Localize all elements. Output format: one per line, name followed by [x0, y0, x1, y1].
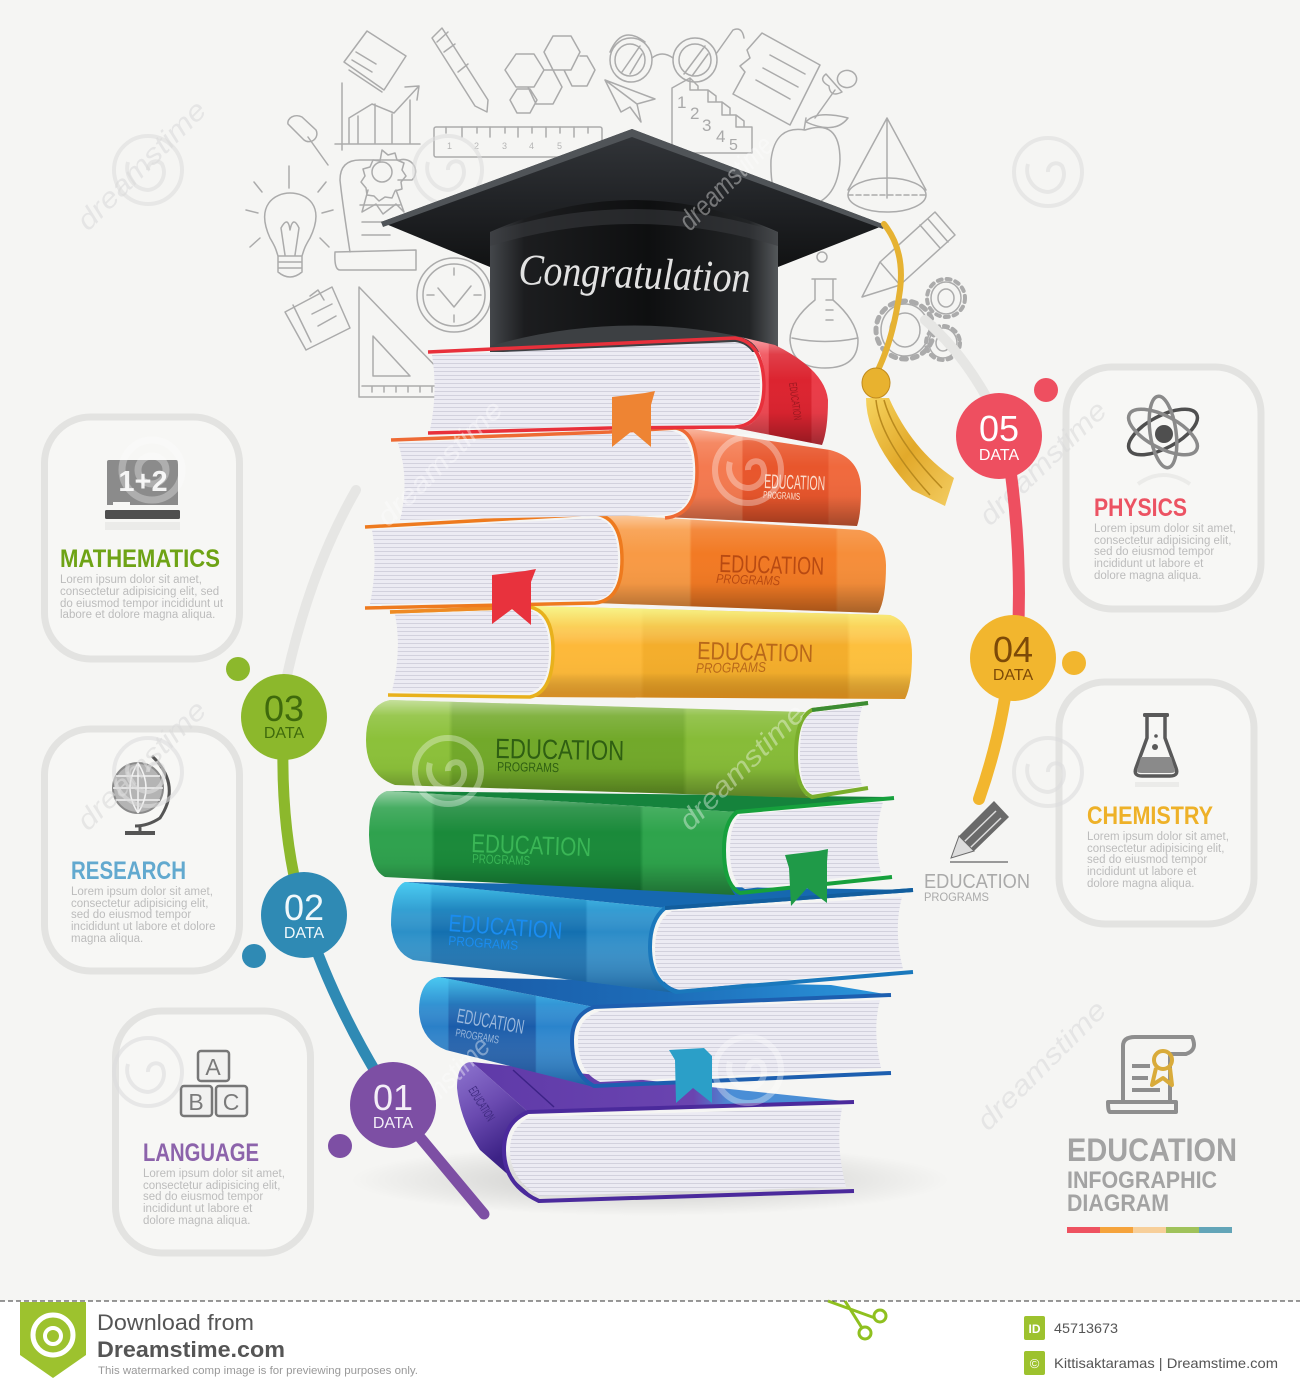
step 05 — [956, 378, 1058, 479]
label: education programs — [924, 871, 1030, 904]
book 7: blue: PROGRAMS — [448, 933, 519, 953]
heading: research: RESEARCH — [71, 857, 186, 885]
text: mathematics body: labore et dolore magna aliqua. — [60, 609, 215, 621]
doodle icons cluster: 2 — [474, 141, 479, 151]
icon: pencil start marker — [950, 801, 1009, 862]
step 01: 01 — [373, 1077, 413, 1118]
text: language body: consectetur adipisicing elit, — [143, 1180, 280, 1192]
panel: language — [116, 1011, 310, 1253]
tassel — [862, 224, 954, 506]
book 7: blue: EDUCATION — [448, 910, 563, 945]
doodle icons cluster: 5 — [729, 137, 738, 154]
doodle icons cluster: 3 — [702, 116, 711, 135]
doodle icons cluster: 4 — [716, 127, 725, 146]
panel: physics — [1066, 367, 1261, 609]
book 2: orange red — [391, 427, 861, 526]
doodle icons cluster: 1 — [447, 141, 452, 151]
book 6: dark green — [369, 791, 894, 895]
panel: chemistry — [1059, 682, 1254, 924]
text: chemistry body — [1087, 831, 1229, 890]
badge: copyright: © — [1030, 1356, 1040, 1371]
book 9: purple — [457, 1062, 854, 1202]
text: language body: sed do eiusmod tempor — [143, 1191, 263, 1203]
bookmark: teal — [669, 1048, 712, 1103]
icon: globe — [113, 756, 169, 835]
text: research body: magna aliqua. — [71, 933, 143, 945]
icon: diploma — [1108, 1037, 1194, 1112]
book 7: blue — [391, 882, 913, 993]
graduation cap — [381, 129, 885, 352]
icon: ABC blocks: B — [188, 1089, 204, 1115]
watermark — [70, 94, 1113, 1136]
icon: blackboard 1+2 — [105, 460, 180, 530]
book 4: yellow — [388, 606, 912, 699]
step 05: DATA — [979, 447, 1019, 464]
doodle icons cluster: 3 — [502, 141, 507, 151]
title: education infographic diagram — [1067, 1132, 1237, 1217]
text: language body — [143, 1168, 285, 1227]
book 8: dark blue: EDUCATION — [455, 1005, 526, 1039]
book 3: orange: PROGRAMS — [716, 571, 781, 588]
badge: image id — [1024, 1316, 1045, 1340]
book 3: orange: EDUCATION — [719, 550, 825, 581]
step 01 — [328, 1062, 436, 1158]
text: research body: consectetur adipisicing elit, — [71, 898, 208, 910]
icon: ABC blocks: C — [223, 1089, 239, 1115]
label: education programs: EDUCATION — [924, 871, 1030, 893]
book 2: orange red: EDUCATION — [764, 471, 826, 495]
text: mathematics body: do eiusmod tempor incididunt ut — [60, 598, 224, 610]
text: physics body: dolore magna aliqua. — [1094, 570, 1201, 582]
bookmark: orange — [612, 391, 655, 447]
text: dreamstime.com: Dreamstime.com — [97, 1337, 285, 1362]
text: research body: incididunt ut labore et dolore — [71, 921, 216, 933]
book stack — [365, 337, 913, 1202]
text: id number: 45713673 — [1054, 1320, 1118, 1336]
step 05: 05 — [979, 408, 1019, 449]
bookmark: green — [785, 849, 828, 906]
book watermarks: dreamstime — [672, 698, 811, 836]
text: research body — [71, 886, 216, 945]
text: physics body: consectetur adipisicing elit, — [1094, 535, 1231, 547]
book 2: orange red: PROGRAMS — [763, 490, 801, 503]
text: chemistry body: incididunt ut labore et — [1087, 866, 1197, 878]
doodle icons cluster: 1 — [677, 93, 686, 112]
text: language body: dolore magna aliqua. — [143, 1215, 250, 1227]
book 6: dark green: PROGRAMS — [472, 851, 531, 868]
watermark: dreamstime — [970, 994, 1112, 1136]
book 5: light green: EDUCATION — [495, 733, 624, 766]
icon: dreamstime ribbon — [20, 1302, 86, 1378]
step 02: 02 — [284, 887, 324, 928]
doodle icons cluster: 4 — [529, 141, 534, 151]
text: chemistry body: dolore magna aliqua. — [1087, 878, 1194, 890]
book 1: red — [428, 337, 828, 445]
book watermarks: dreamstime — [382, 1030, 496, 1144]
text: physics body: incididunt ut labore et — [1094, 558, 1204, 570]
badge: image id: ID — [1028, 1322, 1041, 1336]
colour strip — [1067, 1227, 1232, 1233]
icon: ABC blocks: A — [205, 1054, 221, 1080]
panel: research — [44, 729, 240, 971]
text: physics body: sed do eiusmod tempor — [1094, 546, 1214, 558]
heading: physics: PHYSICS — [1094, 494, 1187, 522]
doodle icons cluster — [246, 28, 965, 397]
title: education infographic diagram: DIAGRAM — [1067, 1190, 1169, 1217]
text: chemistry body: sed do eiusmod tempor — [1087, 854, 1207, 866]
text: author: Kittisaktaramas | Dreamstime.com — [1054, 1355, 1278, 1371]
watermark: dreamstime — [70, 94, 212, 236]
book 1: red: EDUCATION — [786, 382, 803, 421]
step 03 — [226, 657, 327, 760]
doodle icons cluster: 2 — [690, 104, 699, 123]
step 03: 03 — [264, 688, 304, 729]
heading: mathematics: MATHEMATICS — [60, 545, 220, 573]
icon: scissors — [828, 1301, 886, 1339]
text: chemistry body: Lorem ipsum dolor sit amet, — [1087, 831, 1229, 843]
ground shadow — [350, 1144, 950, 1216]
text: mathematics body: consectetur adipisicing elit, sed — [60, 586, 219, 598]
book 6: dark green: EDUCATION — [471, 828, 592, 862]
timeline path: coloured connectors — [283, 440, 1019, 1214]
text: preview note: This watermarked comp image is for previewing purposes only. — [98, 1365, 418, 1377]
book watermarks: dreamstime — [672, 129, 779, 236]
footer band — [0, 1301, 1300, 1390]
timeline path: gray connectors — [286, 320, 987, 680]
text: mathematics body — [60, 574, 224, 621]
heading: language: LANGUAGE — [143, 1139, 259, 1167]
text: physics body: Lorem ipsum dolor sit amet, — [1094, 523, 1236, 535]
text: chemistry body: consectetur adipisicing elit, — [1087, 843, 1224, 855]
watermark: dreamstime — [973, 394, 1113, 531]
step 03: DATA — [264, 725, 304, 742]
watermark: dreamstime — [70, 694, 212, 836]
book 8: dark blue — [419, 977, 891, 1087]
doodle icons cluster: 5 — [557, 141, 562, 151]
book watermarks — [370, 129, 811, 1144]
icon: ABC blocks — [181, 1051, 247, 1116]
bookmark: red — [492, 569, 536, 625]
title: education infographic diagram: INFOGRAPHIC — [1067, 1167, 1217, 1194]
text: download from: Download from — [97, 1310, 254, 1335]
step 01: DATA — [373, 1115, 413, 1132]
text: language body: Lorem ipsum dolor sit amet, — [143, 1168, 285, 1180]
text: research body: Lorem ipsum dolor sit amet, — [71, 886, 213, 898]
step 04 — [970, 615, 1086, 701]
title: education infographic diagram: EDUCATION — [1067, 1132, 1237, 1168]
icon: flask — [1135, 713, 1179, 787]
step 04: 04 — [993, 629, 1033, 670]
step 02 — [242, 872, 347, 968]
book 4: yellow: PROGRAMS — [696, 659, 767, 676]
icon: atom — [1122, 395, 1204, 484]
book 5: light green — [366, 700, 868, 798]
text: physics body — [1094, 523, 1236, 582]
book watermarks: dreamstime — [370, 394, 509, 532]
book 3: orange — [365, 514, 886, 613]
text: research body: sed do eiusmod tempor — [71, 909, 191, 921]
book 9: purple: EDUCATION — [465, 1084, 498, 1124]
text: language body: incididunt ut labore et — [143, 1203, 253, 1215]
heading: chemistry: CHEMISTRY — [1087, 802, 1213, 830]
cap label: Congratulation — [518, 245, 751, 302]
text: mathematics body: Lorem ipsum dolor sit amet, — [60, 574, 202, 586]
badge: copyright — [1024, 1351, 1045, 1375]
step 04: DATA — [993, 667, 1033, 684]
book 8: dark blue: PROGRAMS — [454, 1027, 500, 1047]
book 5: light green: PROGRAMS — [497, 759, 559, 775]
panel: mathematics — [44, 417, 240, 659]
step 02: DATA — [284, 925, 324, 942]
label: education programs: PROGRAMS — [924, 890, 989, 904]
icon: blackboard 1+2: 1+2 — [118, 466, 168, 498]
book 4: yellow: EDUCATION — [697, 637, 814, 668]
